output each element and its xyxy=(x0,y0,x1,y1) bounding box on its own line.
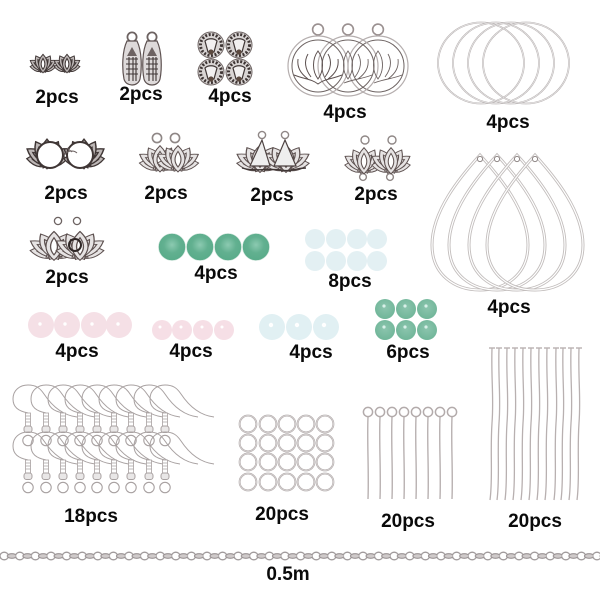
label: large pink beads quantity: 4pcs xyxy=(55,341,99,362)
component: head pins xyxy=(489,348,582,500)
label: round hoops quantity: 4pcs xyxy=(486,112,530,133)
beads: green row xyxy=(158,234,270,260)
label: round lotus medals quantity: 4pcs xyxy=(323,102,367,123)
beads: pale blue eight xyxy=(305,229,387,271)
component: ear hooks xyxy=(13,385,214,493)
label: teardrop hoops quantity: 4pcs xyxy=(487,297,531,318)
label: jump rings quantity: 20pcs xyxy=(255,504,309,525)
beads: large pale blue row xyxy=(259,314,339,340)
charm: open lotus pair xyxy=(136,133,202,174)
component: cable chain xyxy=(0,549,600,563)
component: eye pins xyxy=(363,407,457,499)
charm: ring lotus links xyxy=(23,139,108,171)
label: pale blue beads quantity: 8pcs xyxy=(328,271,372,292)
label: meditating figures quantity: 2pcs xyxy=(250,185,294,206)
beads: large pink row xyxy=(28,312,132,338)
charm: round lotus beads xyxy=(198,32,252,85)
label: om lotus pair quantity: 2pcs xyxy=(45,267,89,288)
label: small pink beads quantity: 4pcs xyxy=(169,341,213,362)
label: large pale blue beads quantity: 4pcs xyxy=(289,342,333,363)
charm: meditating figures on lotus xyxy=(233,131,313,174)
label: open lotus pair quantity: 2pcs xyxy=(144,183,188,204)
charm: small double lotus xyxy=(28,54,82,74)
label: round lotus beads quantity: 4pcs xyxy=(208,86,252,107)
beads: green six xyxy=(375,299,437,340)
label: praying hands quantity: 2pcs xyxy=(119,84,163,105)
label: eye pins quantity: 20pcs xyxy=(381,511,435,532)
charm: om lotus pair xyxy=(26,217,108,262)
label: green six quantity: 6pcs xyxy=(386,342,430,363)
component: teardrop hoops xyxy=(432,155,583,290)
label: ring lotus links quantity: 2pcs xyxy=(44,183,88,204)
pendant: round lotus medals xyxy=(288,24,408,96)
charm: lotus flower pair xyxy=(342,136,413,180)
beads: small pink row xyxy=(152,320,234,340)
component: jump rings xyxy=(240,416,333,490)
component: round hoops xyxy=(438,22,569,104)
label: lotus flower pair quantity: 2pcs xyxy=(354,184,398,205)
charm: praying hands xyxy=(123,32,161,85)
label: small double lotus quantity: 2pcs xyxy=(35,87,79,108)
label: green beads quantity: 4pcs xyxy=(194,263,238,284)
label: chain length: 0.5m xyxy=(266,564,310,585)
label: head pins quantity: 20pcs xyxy=(508,511,562,532)
label: ear hooks quantity: 18pcs xyxy=(64,506,118,527)
